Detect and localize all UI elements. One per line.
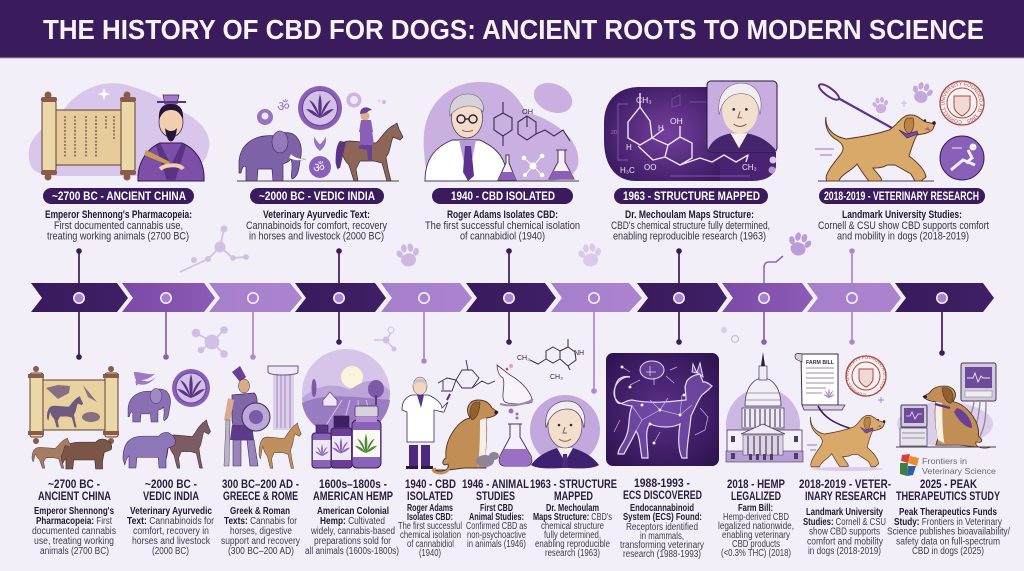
pill: 1963: 1963 - STRUCTURE MAPPED bbox=[623, 191, 760, 203]
illustration: Mechoulam portrait and molecule: CH₃ bbox=[550, 374, 563, 381]
text: Landmark: Landmark University Studies: bbox=[842, 209, 962, 221]
column: Ancient China: Pharmacopeia: First bbox=[36, 516, 112, 527]
column: American Hemp: preparations sold for bbox=[314, 536, 392, 547]
column: Structure Mapped: research (1963) bbox=[545, 548, 600, 559]
column: Hemp Legalized: Hemp-derived CBD bbox=[723, 512, 789, 523]
column: American Hemp: 1600s–1800s - bbox=[319, 477, 387, 491]
text: Roger Adams: Roger Adams Isolates CBD: bbox=[447, 209, 558, 221]
pill: ~2000 BC bbox=[250, 188, 384, 204]
column: Structure Mapped: Maps Structure: CBD's bbox=[533, 512, 612, 523]
column: Vedic India: VEDIC INDIA bbox=[143, 489, 199, 503]
text: Veterinary Ayurvedic bbox=[246, 209, 387, 242]
illustration: structure panel with molecule and portrait: H bbox=[658, 124, 664, 133]
illustration: ECS glowing dog panel bbox=[606, 353, 719, 466]
illustration: structure panel with molecule and portrait: 2D bbox=[611, 130, 618, 136]
column: ECS Discovered: research (1988-1993) bbox=[623, 549, 701, 560]
illustration: structure panel with molecule and portrait bbox=[604, 81, 777, 181]
column: Peak Therapeutics bbox=[887, 477, 1010, 557]
illustration: elephant, horse rider, medallion bbox=[237, 86, 403, 181]
column: Hemp Legalized bbox=[718, 477, 794, 559]
column: Peak Therapeutics: Study: Frontiers in Veterinary bbox=[894, 517, 1002, 528]
column: Hemp Legalized: LEGALIZED bbox=[731, 489, 781, 503]
column: Hemp Legalized: Farm Bill: bbox=[738, 503, 773, 514]
column: CBD Isolated bbox=[398, 477, 462, 559]
column: Ancient China: use, treating working bbox=[34, 536, 114, 547]
column: Animal Studies: 1946 - ANIMAL bbox=[462, 477, 529, 491]
column: ECS Discovered: transforming veterinary bbox=[620, 540, 704, 551]
text: Veterinary Ayurvedic: in horses and livestock (2000 BC) bbox=[249, 230, 384, 242]
column: Veterinary Research: in dogs (2018-2019) bbox=[808, 546, 881, 557]
logo: Frontiers in Veterinary Science: Frontiers in bbox=[922, 456, 967, 466]
column: Veterinary Research bbox=[799, 477, 891, 557]
text: Mechoulam bbox=[611, 209, 770, 242]
column: Animal Studies: non-psychoactive bbox=[467, 530, 526, 541]
column: Peak Therapeutics: CBD in dogs (2025) bbox=[912, 546, 984, 557]
column: ECS Discovered: 1988-1993 - bbox=[634, 476, 690, 490]
pill: ~2700 BC bbox=[43, 188, 194, 204]
pill: 1940 bbox=[432, 188, 573, 204]
illustration: structure panel with molecule and portrait: CH₃ bbox=[636, 95, 652, 105]
column: Structure Mapped: fully determined, bbox=[544, 530, 601, 541]
title: THE HISTORY OF CBD FOR DOGS: ANCIENT ROOTS TO MODERN SCIENCE bbox=[43, 14, 984, 45]
column: Structure Mapped: chemical structure bbox=[541, 521, 604, 532]
column: Ancient China: animals (2700 BC) bbox=[40, 546, 109, 557]
column: Veterinary Research: show CBD supports bbox=[809, 526, 880, 538]
text: Emperor Shennong: Emperor Shennong's Pharmacopeia: bbox=[45, 209, 192, 221]
illustration: Roman soldier, column, horse bbox=[224, 366, 301, 468]
illustration: bottom elephant, cow, horse, medallion bbox=[123, 369, 211, 468]
column: CBD Isolated: chemical isolation bbox=[400, 530, 461, 541]
column: Veterinary Research: Studies: Cornell & CSU bbox=[803, 517, 886, 528]
column: Veterinary Research: INARY RESEARCH bbox=[805, 489, 886, 503]
column: Greece and Rome: GREECE & ROME bbox=[223, 489, 298, 503]
column: Ancient China: ANCIENT CHINA bbox=[38, 489, 111, 503]
illustration: Farm Bill, seal, dog: CORNELL UNIVERSITY FOUNDED A.D. 1865 bbox=[845, 355, 886, 397]
column: American Hemp: American Colonial bbox=[317, 506, 389, 517]
column: Vedic India: (2000 BC) bbox=[152, 546, 189, 557]
column: Structure Mapped: Dr. Mechoulam bbox=[546, 503, 599, 514]
column: CBD Isolated: (1940) bbox=[419, 548, 441, 559]
column: Vedic India: Text: Cannabinoids for bbox=[127, 516, 215, 527]
illustration: elephant, horse rider, medallion: ॐ bbox=[277, 98, 290, 114]
illustration: hemp field and bottles bbox=[302, 349, 390, 468]
column: CBD Isolated: Isolates CBD: bbox=[407, 512, 453, 523]
column: Peak Therapeutics: Peak Therapeutics Funds bbox=[899, 507, 997, 518]
text: Emperor Shennong: First documented cannabis use, bbox=[54, 220, 183, 232]
text: Roger Adams: of cannabidiol (1940) bbox=[460, 230, 545, 242]
illustration: walking dog with leash and university seals: CORNELL UNIVERSITY FOUNDED A.D. 1865 bbox=[941, 82, 983, 124]
pill: ~2000 BC: ~2000 BC - VEDIC INDIA bbox=[259, 191, 375, 203]
column: Animal Studies bbox=[462, 477, 529, 550]
column: Animal Studies: STUDIES bbox=[476, 489, 515, 503]
timeline connectors bbox=[76, 248, 945, 394]
column: ECS Discovered: Endocannabinoid bbox=[630, 503, 694, 514]
column: ECS Discovered: in mammals, bbox=[640, 531, 684, 542]
text: Mechoulam: CBD's chemical structure fully determined, bbox=[611, 220, 770, 232]
text: Mechoulam: Dr. Mechoulam Maps Structure: bbox=[625, 209, 754, 221]
column: Ancient China: Emperor Shennong's bbox=[34, 506, 114, 517]
column: Veterinary Research: Landmark University bbox=[806, 507, 883, 518]
illustration: elephant, horse rider, medallion: ॐ bbox=[313, 160, 325, 175]
pill: 2018-2019 bbox=[819, 188, 985, 204]
illustration: walking dog with leash and university seals bbox=[815, 80, 985, 182]
column: Greece and Rome: (300 BC–200 AD) bbox=[228, 546, 294, 557]
column: CBD Isolated: 1940 - CBD bbox=[405, 477, 456, 491]
column: Hemp Legalized: enabling veterinary bbox=[722, 530, 790, 541]
headings and descriptions: bottom row bbox=[32, 476, 1010, 560]
column: Peak Therapeutics: safety data on full-spectrum bbox=[896, 536, 1000, 548]
illustration: structure panel with molecule and portrait: OO bbox=[644, 163, 656, 172]
column: Structure Mapped: enabling reproducible bbox=[535, 539, 610, 550]
column: Veterinary Research: 2018-2019 - VETER- bbox=[799, 477, 891, 491]
column: American Hemp: widely, cannabis-based bbox=[310, 526, 395, 537]
column: Vedic India bbox=[127, 477, 215, 557]
illustration: scientist, dog, rat, flask bbox=[402, 360, 533, 473]
column: Ancient China: ~2700 BC - bbox=[48, 477, 100, 491]
text: Mechoulam: enabling reproducible research (1963) bbox=[613, 230, 766, 242]
text: Roger Adams bbox=[425, 209, 580, 242]
column: Animal Studies: Animal Studies: bbox=[469, 512, 524, 523]
column: Structure Mapped: MAPPED bbox=[554, 489, 593, 503]
illustration: structure panel with molecule and portrait: CH₃ bbox=[742, 163, 757, 172]
column: Greece and Rome: horses, digestive bbox=[230, 526, 292, 537]
column: Animal Studies: Confirmed CBD as bbox=[466, 521, 527, 532]
text: Veterinary Ayurvedic: Cannabinoids for comfort, recovery bbox=[246, 220, 387, 232]
column: Greece and Rome: Greek & Roman bbox=[230, 506, 290, 517]
pills and descriptions: top row bbox=[43, 188, 989, 242]
column: ECS Discovered: Receptors identified bbox=[626, 522, 698, 533]
column: Animal Studies: First CBD bbox=[480, 503, 513, 514]
text: Roger Adams: The first successful chemical isolation bbox=[425, 220, 580, 232]
pill: 1940: 1940 - CBD ISOLATED bbox=[451, 191, 555, 203]
column: Vedic India: Veterinary Ayurvedic bbox=[130, 506, 212, 517]
illustration: scroll and emperor bbox=[29, 83, 209, 181]
column: Hemp Legalized: (<0.3% THC) (2018) bbox=[721, 548, 791, 559]
text: Landmark: and mobility in dogs (2018-2019) bbox=[837, 230, 969, 242]
logo: Frontiers in Veterinary Science: Veterinary Science bbox=[922, 466, 996, 476]
column: American Hemp: all animals (1600s-1800s) bbox=[305, 546, 399, 557]
column: Greece and Rome: support and recovery bbox=[221, 536, 300, 547]
column: Veterinary Research: comfort and mobility bbox=[807, 536, 883, 548]
column: Vedic India: horses and livestock bbox=[132, 536, 211, 547]
column: CBD Isolated: ISOLATED bbox=[407, 489, 453, 503]
column: Structure Mapped bbox=[530, 477, 617, 559]
column: Ancient China: documented cannabis bbox=[32, 526, 116, 537]
column: Hemp Legalized: CBD products bbox=[732, 539, 780, 550]
column: Greece and Rome: Texts: Cannabis for bbox=[224, 516, 298, 527]
column: CBD Isolated: Roger Adams bbox=[407, 503, 453, 514]
illustration: structure panel with molecule and portrait: H₃C bbox=[620, 166, 635, 175]
text: Emperor Shennong bbox=[45, 209, 192, 242]
column: ECS Discovered: ECS DISCOVERED bbox=[623, 488, 702, 502]
illustration: bottom scroll and animals bbox=[28, 366, 119, 469]
illustration: structure panel with molecule and portrait: OH bbox=[670, 116, 683, 126]
logo: Frontiers in Veterinary Science bbox=[900, 454, 996, 476]
column: Greece and Rome: 300 BC–200 AD - bbox=[222, 477, 299, 491]
column: American Hemp: Hemp: Cultivated bbox=[320, 516, 385, 527]
timeline arrow bar bbox=[31, 283, 994, 312]
column: Greece and Rome bbox=[221, 477, 300, 557]
column: Animal Studies: in animals (1946) bbox=[467, 539, 526, 550]
column: American Hemp bbox=[305, 477, 399, 557]
column: Hemp Legalized: 2018 - HEMP bbox=[727, 477, 785, 491]
column: Ancient China bbox=[32, 477, 116, 557]
column: Vedic India: ~2000 BC - bbox=[145, 477, 197, 491]
text: Emperor Shennong: treating working animals (2700 BC) bbox=[47, 230, 189, 242]
column: American Hemp: AMERICAN HEMP bbox=[313, 489, 393, 503]
illustration: US Capitol bbox=[726, 352, 803, 462]
illustration: Roger Adams scientist and CBD molecule: OH bbox=[522, 109, 533, 116]
illustration: structure panel with molecule and portrait: H bbox=[626, 143, 632, 152]
column: Vedic India: comfort, recovery in bbox=[133, 526, 209, 537]
column: Peak Therapeutics: 2025 - PEAK bbox=[920, 477, 977, 491]
illustration: research dog, monitors, Frontiers logo bbox=[896, 363, 996, 476]
pill: 1963 bbox=[614, 188, 768, 204]
column: Hemp Legalized: legalized nationwide, bbox=[718, 521, 794, 532]
illustration: Farm Bill, seal, dog: FARM BILL bbox=[806, 360, 835, 366]
column: CBD Isolated: The first successful bbox=[398, 521, 462, 532]
decorative molecules and paws bbox=[180, 226, 814, 357]
illustration: Roger Adams scientist and CBD molecule bbox=[424, 78, 579, 181]
illustration: Mechoulam portrait and molecule: NH bbox=[574, 350, 584, 357]
illustration: Mechoulam portrait and molecule: CH₃ bbox=[517, 355, 530, 362]
column: ECS Discovered bbox=[620, 476, 704, 560]
title banner bbox=[0, 0, 1024, 58]
illustration: Mechoulam portrait and molecule bbox=[517, 339, 600, 468]
text: Landmark bbox=[818, 209, 989, 242]
text: Veterinary Ayurvedic: Veterinary Ayurvedic Text: bbox=[263, 209, 370, 221]
illustration: Farm Bill, seal, dog bbox=[794, 353, 887, 471]
pill: ~2700 BC: ~2700 BC - ANCIENT CHINA bbox=[52, 191, 186, 203]
column: ECS Discovered: System (ECS) Found: bbox=[623, 512, 702, 523]
text: Landmark: Cornell & CSU show CBD supports comfort bbox=[818, 220, 989, 232]
column: Structure Mapped: 1963 - STRUCTURE bbox=[530, 477, 617, 491]
column: CBD Isolated: of cannabidiol bbox=[407, 539, 454, 550]
